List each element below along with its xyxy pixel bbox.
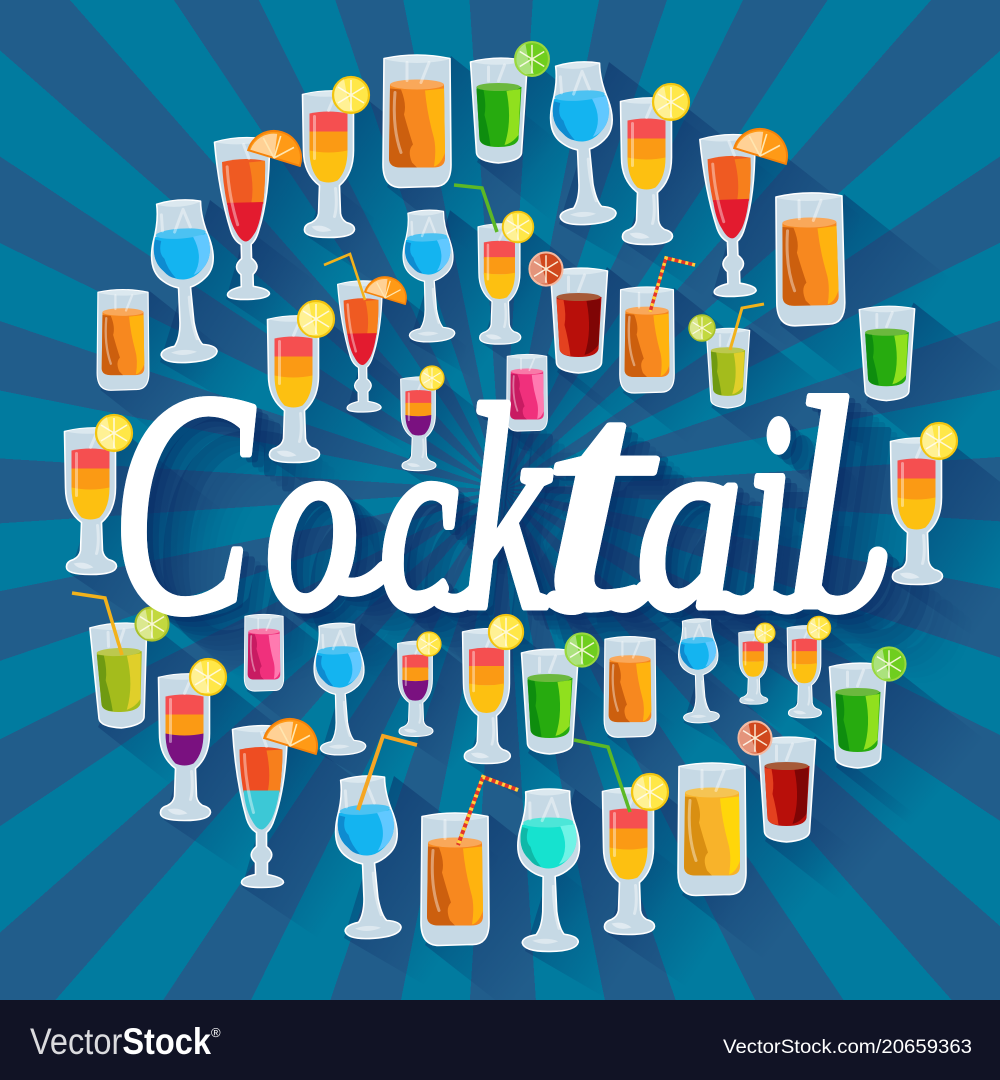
glass: large orange tumbler top: [383, 55, 451, 188]
glass: dark red shot with orange wheel: [529, 252, 608, 373]
glass: yellow tumbler bottom: [678, 763, 746, 896]
title long shadow: [112, 322, 878, 679]
glass: green shot with lime right: [830, 647, 906, 768]
title word: o: [266, 380, 358, 662]
glass: small pink tumbler: [507, 354, 547, 431]
glass: blue tulip left: [148, 198, 220, 364]
title word: C: [112, 328, 256, 679]
glass: red flute with orange slice top right: [700, 122, 794, 297]
glass: purple pilsner bottom left: [158, 659, 226, 820]
glass: layered pilsner with lemon top right: [620, 84, 689, 244]
glass: layered pilsner bottom centre: [463, 615, 523, 764]
glass: small purple pilsner bottom: [398, 632, 441, 736]
glass: blue tulip top: [547, 60, 619, 226]
footer logo: VectorStock: VectorStock: [30, 1021, 211, 1062]
glass: turquoise tulip bottom: [517, 788, 581, 952]
glass: orange tumbler right: [775, 192, 845, 326]
title: Cocktail: [112, 322, 878, 679]
footer image id: VectorStock.com/20659363: [723, 1036, 972, 1058]
glass: layered pilsner top left: [302, 77, 369, 238]
title word: k: [464, 347, 553, 669]
glass: red flute with yellow straw: [324, 254, 411, 412]
glass: yellow-green shot with straw: [689, 304, 764, 408]
glass: small layered pilsner: [787, 616, 831, 718]
glass: tiny layered pilsner: [739, 623, 775, 704]
glass: red flute top left: [214, 124, 308, 300]
footer bar: [0, 1000, 1000, 1080]
glass: small blue tulip inner: [401, 209, 457, 343]
title word: a: [637, 380, 742, 662]
glass: small pink tumbler bottom: [244, 614, 284, 691]
glass: small blue tulip bottom: [312, 622, 368, 756]
title word: t: [540, 322, 661, 676]
glass: green shot bottom centre: [522, 633, 599, 754]
title word: c: [380, 380, 457, 662]
glass: yellow-green shot with straw bottom left: [72, 593, 169, 729]
glass: orange tumbler with red straw: [620, 258, 695, 393]
glass: blue tulip with orange straw bottom: [332, 736, 417, 940]
glass: green shot with lime: [470, 42, 549, 163]
glass: small orange tumbler bottom: [604, 637, 656, 737]
glass: teal and red flute: [232, 712, 324, 888]
glass: small purple pilsner inner: [401, 366, 444, 471]
glass: layered pilsner far right: [890, 423, 957, 584]
footer logo: registered mark: ®: [211, 1025, 221, 1040]
glass: pilsner with green straw bottom: [574, 740, 668, 934]
glass: layered pilsner inner left: [268, 301, 334, 462]
title word: i: [745, 356, 793, 667]
glass: small orange tumbler left: [97, 290, 149, 390]
title word: l: [782, 338, 852, 672]
glass: pilsner with green straw inner: [454, 185, 533, 344]
title connecting strokes: [342, 556, 878, 606]
glass: tiny blue tulip: [677, 618, 721, 724]
glass: orange tumbler with red straw bottom: [421, 777, 518, 946]
glass: layered pilsner far left: [64, 415, 132, 574]
glass: dark red shot with orange wheel bottom: [738, 721, 816, 842]
glass: green shot right: [859, 306, 915, 401]
